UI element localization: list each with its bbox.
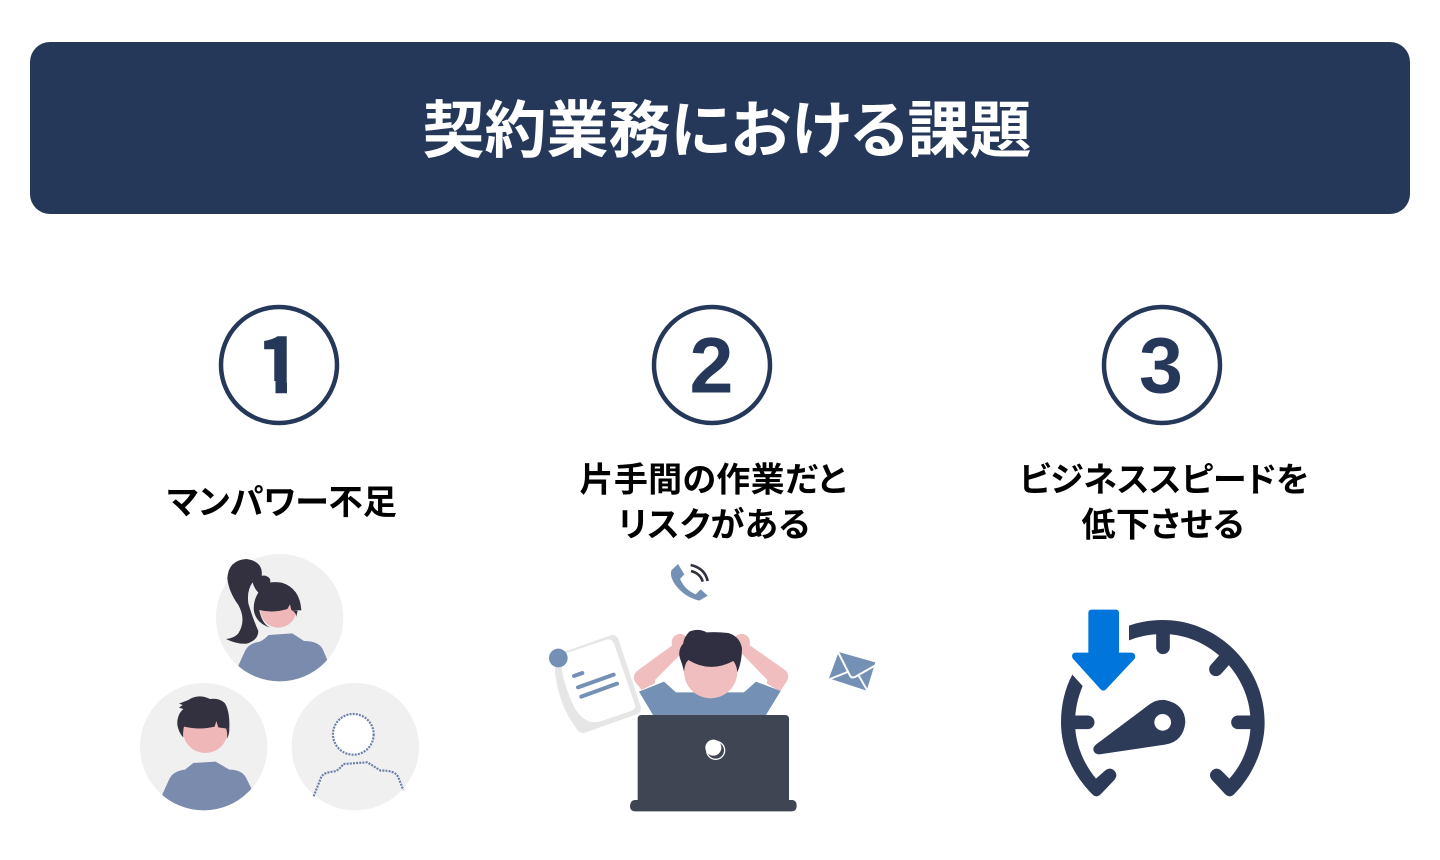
- laptop logo: [705, 740, 725, 759]
- gauge needle: [1093, 700, 1185, 754]
- icon: envelope: [829, 652, 876, 691]
- number badge 2: [654, 307, 770, 423]
- number badge 2: 2: [690, 320, 733, 410]
- gauge ticks: [1075, 633, 1251, 722]
- heading: solo work risk: [580, 452, 846, 546]
- heading: business speed decline: ビジネススピードを: [1019, 452, 1309, 502]
- figure: hair: [679, 630, 742, 672]
- heading: manpower shortage: マンパワー不足: [167, 475, 397, 524]
- gauge dial: [1129, 620, 1265, 796]
- person: woman with ponytail: [216, 554, 343, 685]
- icon: phone ringing: [671, 564, 708, 601]
- illustration: three people: [140, 554, 419, 812]
- down arrow: [1072, 610, 1135, 691]
- figure: head: [684, 645, 737, 698]
- heading: solo work risk: 片手間の作業だと: [580, 452, 846, 502]
- person: man: [140, 683, 267, 812]
- illustration: speedometer with down arrow: [1061, 610, 1265, 796]
- heading: business speed decline: 低下させる: [1082, 498, 1244, 546]
- title banner: [30, 42, 1410, 214]
- number badge 3: 3: [1139, 320, 1183, 410]
- illustration: overwhelmed worker at laptop: [549, 564, 876, 811]
- number badge 3: [1104, 307, 1220, 423]
- number badge 1: [221, 306, 337, 423]
- laptop: [630, 715, 797, 811]
- heading: business speed decline: [1019, 452, 1309, 546]
- icon: document with pin: [549, 635, 641, 733]
- title text: 契約業務における課題: [423, 80, 1031, 170]
- heading: solo work risk: リスクがある: [618, 498, 810, 546]
- person: vacant position dotted outline: [292, 683, 419, 810]
- number badge 1: 1: [257, 306, 301, 414]
- figure: torso: [639, 682, 781, 717]
- figure: arms: [634, 634, 788, 692]
